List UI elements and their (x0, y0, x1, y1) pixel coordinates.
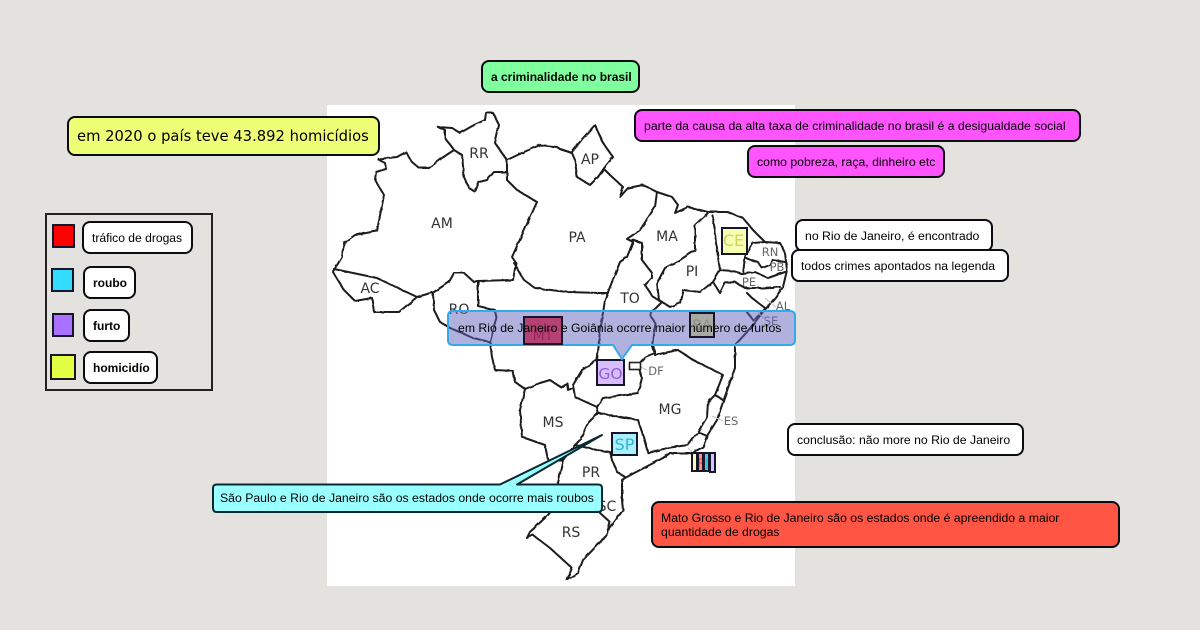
callout: robberies (212, 434, 603, 513)
text block: conclusion (787, 423, 1024, 456)
marker: Mato Grosso drug trafficking (523, 316, 563, 345)
label leader lines (637, 298, 776, 453)
state labels: GO (598, 365, 623, 383)
state labels: MS (543, 415, 564, 431)
state labels: PB (770, 260, 785, 274)
state labels: PE (742, 275, 756, 289)
text block: Rio found (795, 219, 993, 252)
state labels: RR (469, 146, 489, 162)
state labels: SP (615, 435, 635, 454)
state labels: RO (449, 302, 469, 318)
state labels: AL (776, 299, 791, 313)
legend label: homicide (83, 351, 158, 384)
text block: drug seizures: Mato Grosso e Rio de Janeiro são os estados onde é apreendido a maior quantidade de drogas (661, 511, 1059, 539)
callout: thefts bubble (447, 310, 796, 361)
marker: São Paulo robbery (611, 432, 638, 456)
state labels: BA (692, 318, 712, 334)
state labels: SC (598, 499, 617, 515)
state labels: MG (659, 402, 681, 418)
text block: examples: como pobreza, raça, dinheiro etc (757, 155, 935, 169)
title: a criminalidade no brasil (491, 70, 632, 84)
panel: Brazil map (327, 105, 795, 586)
legend label: robbery: roubo (93, 276, 127, 290)
state labels: DF (648, 364, 664, 378)
state labels: RN (762, 245, 778, 259)
state borders (333, 113, 787, 580)
legend swatch: theft (52, 313, 74, 337)
title (481, 60, 640, 93)
state labels: RS (562, 525, 580, 541)
legend label: theft (83, 309, 130, 342)
text block: cause: parte da causa da alta taxa de criminalidade no brasil é a desigualdade social (644, 119, 1066, 133)
text block: homicides 2020 (67, 116, 380, 156)
state labels: AC (360, 281, 380, 297)
state labels: SE (764, 314, 778, 328)
state labels: MA (656, 229, 678, 245)
state labels: RJ (697, 456, 709, 470)
state labels: PR (582, 465, 600, 481)
text block: all crimes (791, 249, 1009, 282)
callout text: São Paulo e Rio de Janeiro são os estados onde ocorre mais roubos (220, 491, 594, 505)
text block: all crimes: todos crimes apontados na legenda (801, 259, 995, 273)
legend label: drug trafficking (82, 221, 193, 254)
state labels: PA (568, 230, 586, 246)
legend swatch: drug trafficking (52, 224, 75, 248)
legend swatch: homicide (50, 354, 76, 380)
state labels: TO (619, 291, 640, 307)
marker: Ceará homicide (721, 227, 748, 255)
text block: conclusion: conclusão: não more no Rio de Janeiro (797, 433, 1010, 447)
text block: homicides 2020: em 2020 o país teve 43.892 homicídios (77, 128, 369, 144)
state labels: MT (533, 328, 554, 344)
marker: Rio de Janeiro all crimes (691, 452, 716, 473)
state labels (360, 146, 791, 541)
legend label: theft: furto (93, 319, 120, 333)
legend swatch: robbery (51, 268, 74, 292)
text block: examples (747, 145, 945, 178)
marker: Goiás theft (596, 359, 625, 386)
state labels: ES (724, 414, 738, 428)
state labels: AP (581, 152, 599, 168)
legend label: drug trafficking: tráfico de drogas (92, 231, 182, 245)
text block: cause (634, 109, 1081, 142)
legend label: homicide: homicidío (93, 361, 150, 375)
text block: drug seizures (651, 501, 1120, 548)
legend (45, 213, 213, 391)
callout bubble with tail (212, 434, 603, 513)
state labels: AM (431, 216, 453, 232)
callout: thefts text: em Rio de Janeiro e Goiânia ocorre maior número de furtos (458, 321, 781, 335)
marker: Bahia homicide (689, 312, 715, 338)
state labels: CE (723, 231, 744, 250)
state labels: PI (686, 264, 698, 280)
legend label: robbery (83, 266, 136, 299)
text block: Rio found: no Rio de Janeiro, é encontrado (805, 229, 979, 243)
DF box (630, 362, 640, 370)
